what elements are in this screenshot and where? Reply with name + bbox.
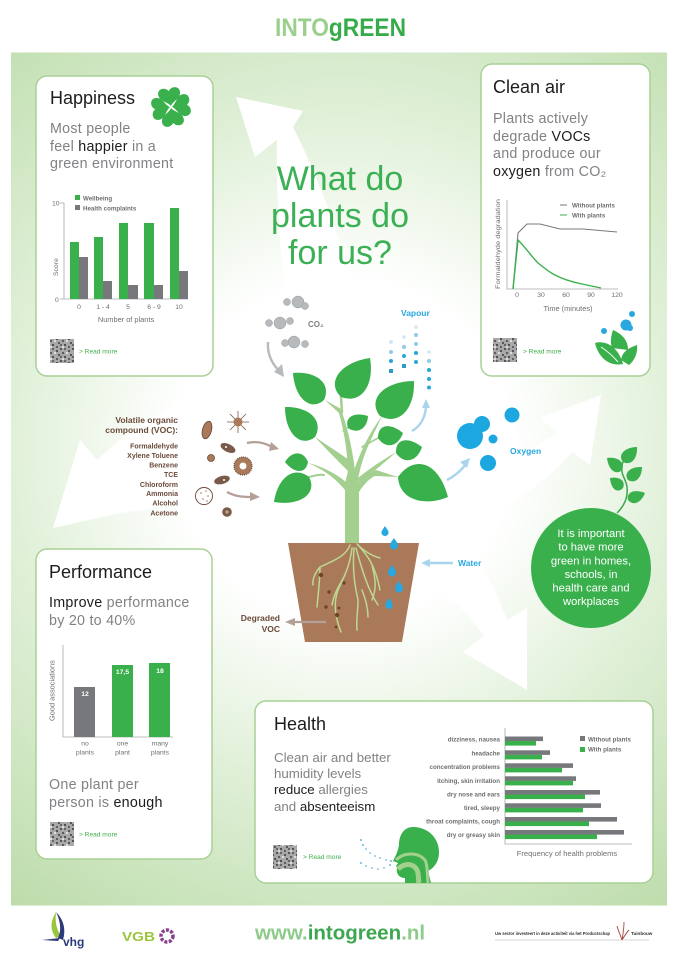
icon: CO2 bubbles	[266, 296, 308, 348]
bar chart: frequency of health problems: With plants	[588, 746, 622, 754]
bar chart: wellbeing and health complaints: 10	[175, 304, 183, 311]
arrow: vapour up	[412, 399, 430, 431]
vapour dots	[389, 325, 431, 390]
bar chart: good associations	[48, 645, 173, 756]
link: read more: > Read more	[79, 832, 118, 838]
heading: performance: Performance	[49, 562, 152, 582]
bar chart: frequency of health problems: tired, sleepy	[464, 805, 501, 812]
line chart: formaldehyde degradation: Time (minutes)	[543, 304, 593, 313]
text: happiness message: green environment	[50, 156, 173, 172]
line chart: formaldehyde degradation: 90	[587, 292, 595, 299]
green circle callout: schools, in	[565, 569, 617, 581]
logo: vhg: vhg	[63, 935, 84, 949]
website url: www.intogreen.nl	[254, 922, 425, 944]
link: read more: > Read more	[303, 854, 342, 861]
bar chart: wellbeing and health complaints: 10	[52, 200, 60, 208]
icons: VOC particles	[196, 411, 252, 517]
heading: clean air: Clean air	[493, 77, 565, 97]
line chart: formaldehyde degradation: 120	[611, 292, 623, 299]
bar chart: wellbeing and health complaints	[52, 195, 188, 324]
logo: INTOGREEN: INTOgREEN	[275, 14, 406, 42]
water drops	[381, 526, 403, 609]
background white arrows	[53, 97, 601, 690]
QR code	[273, 845, 297, 869]
stem and branches	[308, 397, 398, 543]
QR code	[50, 339, 74, 363]
text: volatile organic compounds list: compound (VOC):	[105, 425, 178, 435]
bar chart: good associations: plant	[115, 750, 130, 756]
text: improve performance: by 20 to 40%	[49, 613, 135, 629]
text: volatile organic compounds list: Ammonia	[146, 491, 178, 498]
title: What do	[277, 160, 403, 198]
heading: happiness: Happiness	[50, 88, 135, 108]
QR code	[493, 338, 517, 362]
arrow: oxygen	[447, 458, 470, 480]
pot with soil	[288, 543, 419, 642]
line chart: formaldehyde degradation: Formaldehyde degradation	[495, 199, 502, 289]
text: volatile organic compounds list: Formaldehyde	[130, 444, 178, 450]
bar chart: frequency of health problems: Without plants	[588, 736, 631, 744]
bar chart: wellbeing and health complaints: Number of plants	[98, 315, 154, 324]
text: volatile organic compounds list: Xylene Toluene	[127, 453, 178, 460]
leaves	[266, 349, 456, 513]
bar chart: good associations: Good associations	[48, 660, 56, 721]
bar chart: wellbeing and health complaints: 6 - 9	[147, 304, 161, 311]
bar chart: frequency of health problems	[426, 728, 632, 858]
green circle callout: to have more	[558, 542, 624, 554]
label: degraded VOC	[241, 613, 280, 634]
line chart: formaldehyde degradation	[495, 199, 623, 313]
text: health message: and absenteeism	[274, 799, 375, 814]
text: one plant per person: person is enough	[49, 795, 163, 811]
label: oxygen: Oxygen	[510, 446, 541, 456]
bar chart: good associations: plants	[151, 750, 170, 756]
label: degraded VOC: Degraded	[241, 613, 280, 623]
text: happiness message: feel happier in a	[50, 139, 156, 155]
icon: oxygen bubbles	[457, 408, 520, 471]
text: volatile organic compounds list: TCE	[164, 472, 178, 479]
panel: happiness	[36, 76, 213, 376]
footer	[42, 912, 653, 949]
bar chart: frequency of health problems: itching, skin irritation	[437, 778, 500, 785]
sponsor line	[495, 922, 653, 940]
bar chart: good associations: no	[81, 740, 89, 748]
icon: head breathing	[360, 827, 439, 883]
panel: performance	[36, 549, 212, 859]
arrow: water	[421, 559, 453, 567]
icon: sprig above callout	[603, 442, 647, 513]
bar chart: wellbeing and health complaints: Wellbeing	[83, 196, 112, 202]
roots	[313, 544, 380, 632]
bar chart: wellbeing and health complaints: 5	[126, 304, 130, 311]
text: clean air message: Plants actively	[493, 111, 589, 127]
QR code	[50, 822, 74, 846]
logo: VGB: VGB	[122, 929, 155, 944]
text: volatile organic compounds list: Benzene	[149, 462, 178, 470]
text: happiness message	[50, 121, 173, 172]
green circle callout	[531, 508, 651, 628]
sponsor line: Tuinbouw	[631, 931, 653, 936]
sponsor line: Uw sector investeert in deze activiteit via het Productschap	[495, 931, 610, 936]
bar chart: wellbeing and health complaints: 1 - 4	[96, 304, 110, 311]
bar chart: wellbeing and health complaints: Score	[53, 258, 60, 276]
arrow: CO2 into plant	[268, 342, 284, 377]
title: plants do	[271, 197, 409, 235]
green circle callout: green in homes,	[551, 556, 631, 568]
bar chart: good associations: many	[152, 740, 169, 748]
text: happiness message: Most people	[50, 121, 131, 137]
text: volatile organic compounds list: Acetone	[150, 510, 178, 518]
bar chart: good associations: plants	[76, 750, 95, 756]
text: improve performance: Improve performance	[49, 595, 190, 611]
line chart: formaldehyde degradation: 30	[537, 292, 545, 299]
icon: clover	[149, 85, 193, 129]
text: one plant per person	[49, 777, 163, 811]
soil particles	[319, 573, 346, 628]
bar chart: frequency of health problems: Frequency of health problems	[517, 849, 617, 858]
heading: health: Health	[274, 714, 326, 734]
panel: clean air	[481, 64, 650, 376]
bar chart: frequency of health problems: dizziness, nausea	[448, 736, 501, 744]
bar chart: frequency of health problems: concentration problems	[430, 764, 501, 771]
bar chart: good associations: 12	[81, 691, 89, 698]
panel: health	[255, 701, 653, 883]
green circle callout: It is important	[557, 528, 625, 540]
line chart: formaldehyde degradation: 0	[515, 292, 519, 299]
arrows: VOC into plant	[227, 442, 279, 501]
bar chart: frequency of health problems: headache	[471, 750, 501, 758]
arrow: degraded VOC	[285, 618, 326, 626]
bar chart: frequency of health problems: throat complaints, cough	[426, 818, 500, 826]
line chart: formaldehyde degradation: 60	[562, 292, 570, 299]
bar chart: good associations: one	[117, 740, 128, 748]
text: volatile organic compounds list: Volatile organic	[115, 415, 178, 425]
bar chart: good associations: 17,5	[116, 669, 129, 676]
green circle callout: health care and	[552, 582, 630, 594]
bar chart: wellbeing and health complaints: Health complaints	[83, 206, 137, 212]
text: clean air message: and produce our	[493, 146, 601, 162]
logo: vhg	[42, 912, 84, 949]
bar chart: good associations: 18	[156, 668, 164, 675]
text: volatile organic compounds list: Alcohol	[152, 500, 178, 508]
text: health message	[274, 750, 391, 814]
title: for us?	[288, 234, 392, 272]
text: health message: humidity levels	[274, 766, 362, 781]
line chart: formaldehyde degradation: With plants	[572, 212, 606, 220]
label: CO2: CO₂	[308, 320, 324, 329]
text: clean air message: degrade VOCs	[493, 129, 591, 145]
bar chart: frequency of health problems: dry or greasy skin	[447, 832, 500, 839]
bar chart: wellbeing and health complaints: 0	[77, 304, 81, 311]
text: improve performance	[49, 595, 190, 629]
label: vapour: Vapour	[401, 308, 431, 318]
text: one plant per person: One plant per	[49, 777, 139, 793]
text: health message: reduce allergies	[274, 782, 368, 797]
text: clean air message: oxygen from CO₂	[493, 164, 606, 180]
green circle callout: workplaces	[562, 596, 619, 608]
logo: VGB	[122, 929, 173, 944]
bar chart: wellbeing and health complaints: 0	[55, 297, 59, 304]
text: volatile organic compounds list: Chloroform	[140, 482, 178, 489]
illustration: plant	[266, 349, 456, 642]
link: read more: > Read more	[523, 348, 562, 356]
text: volatile organic compounds list	[105, 415, 178, 518]
title	[271, 160, 409, 272]
text: health message: Clean air and better	[274, 750, 391, 765]
line chart: formaldehyde degradation: Without plants	[572, 202, 615, 210]
link: read more: > Read more	[79, 348, 118, 356]
icon: leaves with bubbles	[595, 311, 637, 365]
text: clean air message	[493, 111, 606, 180]
bar chart: frequency of health problems: dry nose and ears	[447, 792, 501, 798]
label: water: Water	[458, 558, 482, 568]
label: degraded VOC: VOC	[262, 624, 280, 634]
